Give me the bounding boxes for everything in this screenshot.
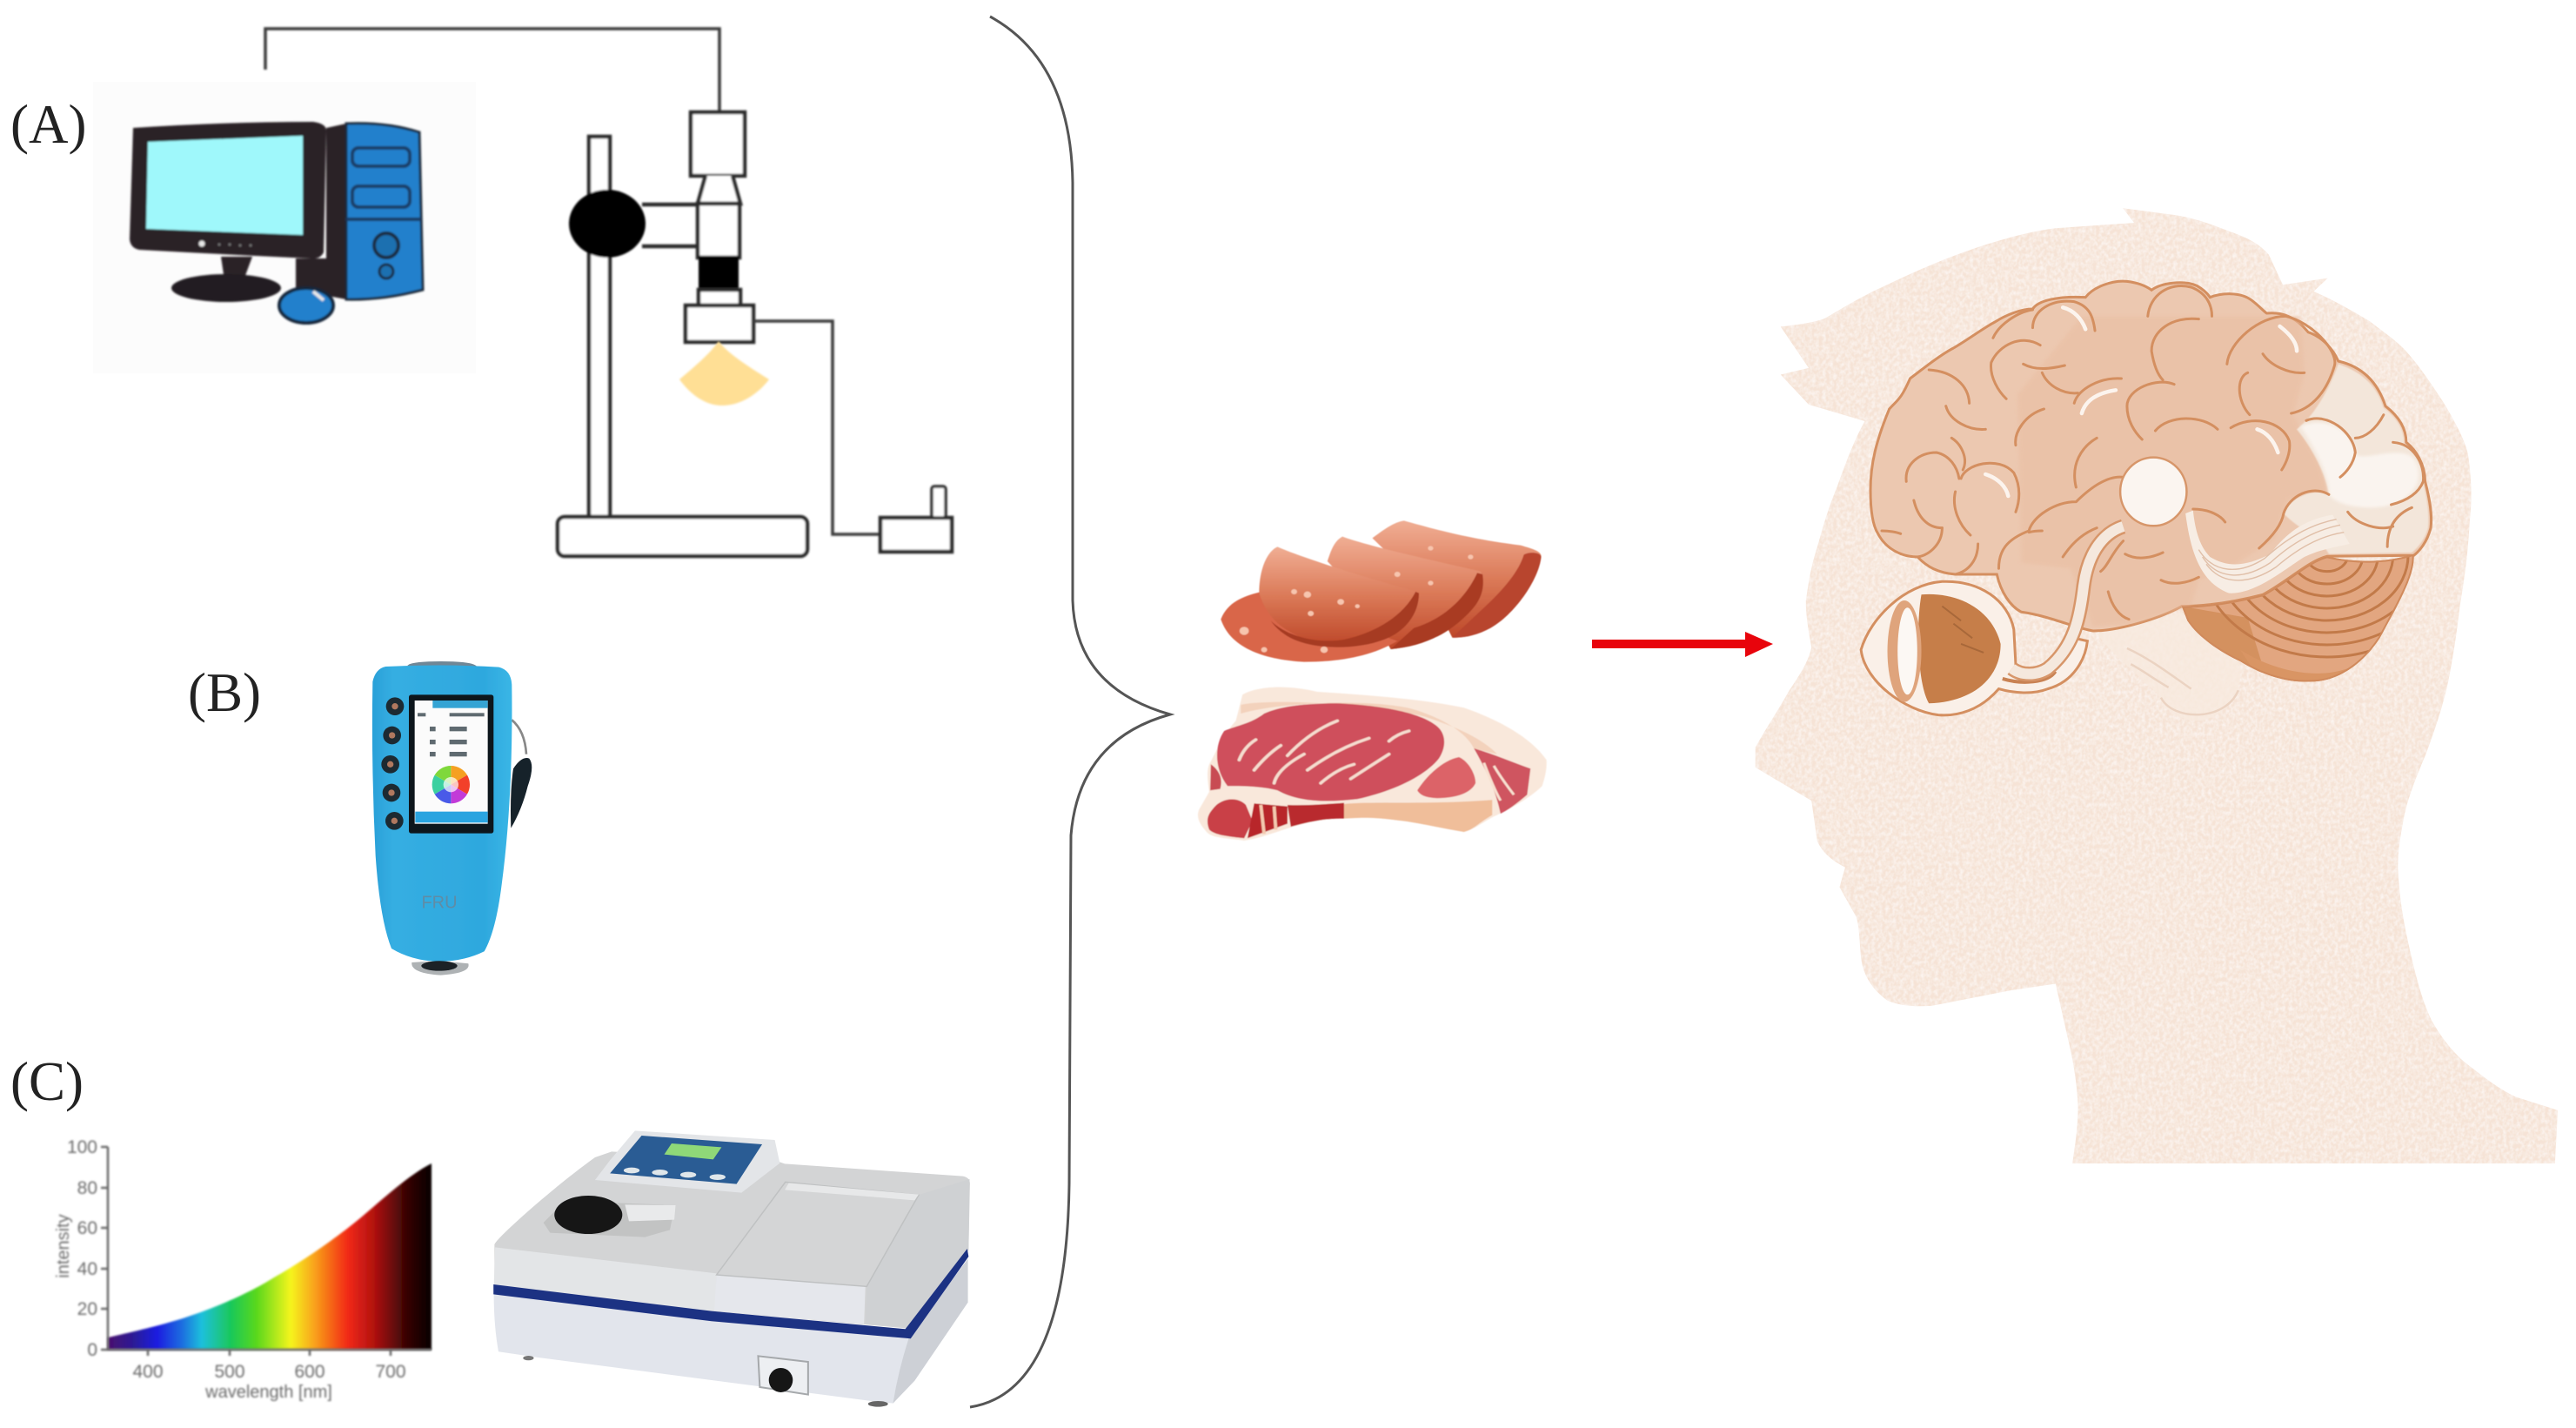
diagram: camera on stand (265, 29, 952, 556)
panel: colorimeter (B) (188, 661, 532, 975)
gyri (1882, 286, 2424, 620)
icon: computer backdrop (93, 82, 476, 373)
axis labels: 60 (77, 1218, 97, 1238)
cerebrum (1870, 281, 2432, 631)
chart: light spectrum intensity vs wavelength (54, 1137, 432, 1402)
gyri highlights (1985, 307, 2297, 496)
front socket (758, 1356, 808, 1395)
darker shading (2017, 316, 2329, 627)
icon: pork chop (1198, 687, 1547, 841)
brainstem (2097, 612, 2241, 721)
icon: desktop computer (130, 122, 423, 323)
panel: meat samples (1198, 520, 1547, 841)
head silhouette (1756, 208, 2558, 1163)
axis labels: 20 (77, 1299, 97, 1319)
eye (1861, 581, 2087, 715)
occipital light area (2284, 364, 2429, 554)
lower body (494, 1259, 968, 1404)
axis labels: 600 (294, 1362, 325, 1382)
icon: salami slices (1221, 520, 1542, 662)
label A: (A) (10, 94, 86, 155)
icon: handheld colorimeter: FRU (421, 893, 458, 912)
optic radiation (2185, 511, 2350, 593)
label C: (C) (10, 1051, 84, 1112)
axis labels: 100 (67, 1137, 97, 1157)
axis labels: wavelength [nm] (204, 1383, 332, 1402)
icon: handheld colorimeter (372, 661, 532, 975)
knob recess (544, 1201, 675, 1237)
axis labels: 0 (87, 1340, 97, 1360)
axis labels: 500 (214, 1362, 245, 1382)
top face (494, 1151, 970, 1329)
label B: (B) (188, 662, 261, 723)
blue band (493, 1249, 968, 1338)
display housing (595, 1130, 779, 1193)
axis labels: 400 (132, 1362, 164, 1382)
panel: spectrophotometer (C) (10, 1051, 970, 1407)
axis labels: 80 (77, 1178, 97, 1198)
panel: human head with visual pathway (1756, 208, 2558, 1163)
axis labels: 40 (77, 1259, 97, 1279)
icon: light beam (679, 341, 769, 406)
arrow: red arrow to head (1592, 632, 1773, 657)
optic chiasm node (2120, 458, 2186, 526)
upper front (494, 1247, 717, 1312)
curly brace (970, 17, 1170, 1407)
optic nerve (2012, 526, 2124, 674)
axis labels: intensity (54, 1214, 73, 1278)
spectrum area (108, 1163, 432, 1350)
cerebellum (2182, 553, 2414, 682)
axis labels (54, 1137, 406, 1402)
axes (101, 1147, 432, 1356)
icon: benchtop spectrophotometer (493, 1130, 970, 1407)
brain group (1861, 281, 2453, 721)
axis labels: 700 (375, 1362, 406, 1382)
panel: colour imaging setup (A) (10, 29, 952, 556)
